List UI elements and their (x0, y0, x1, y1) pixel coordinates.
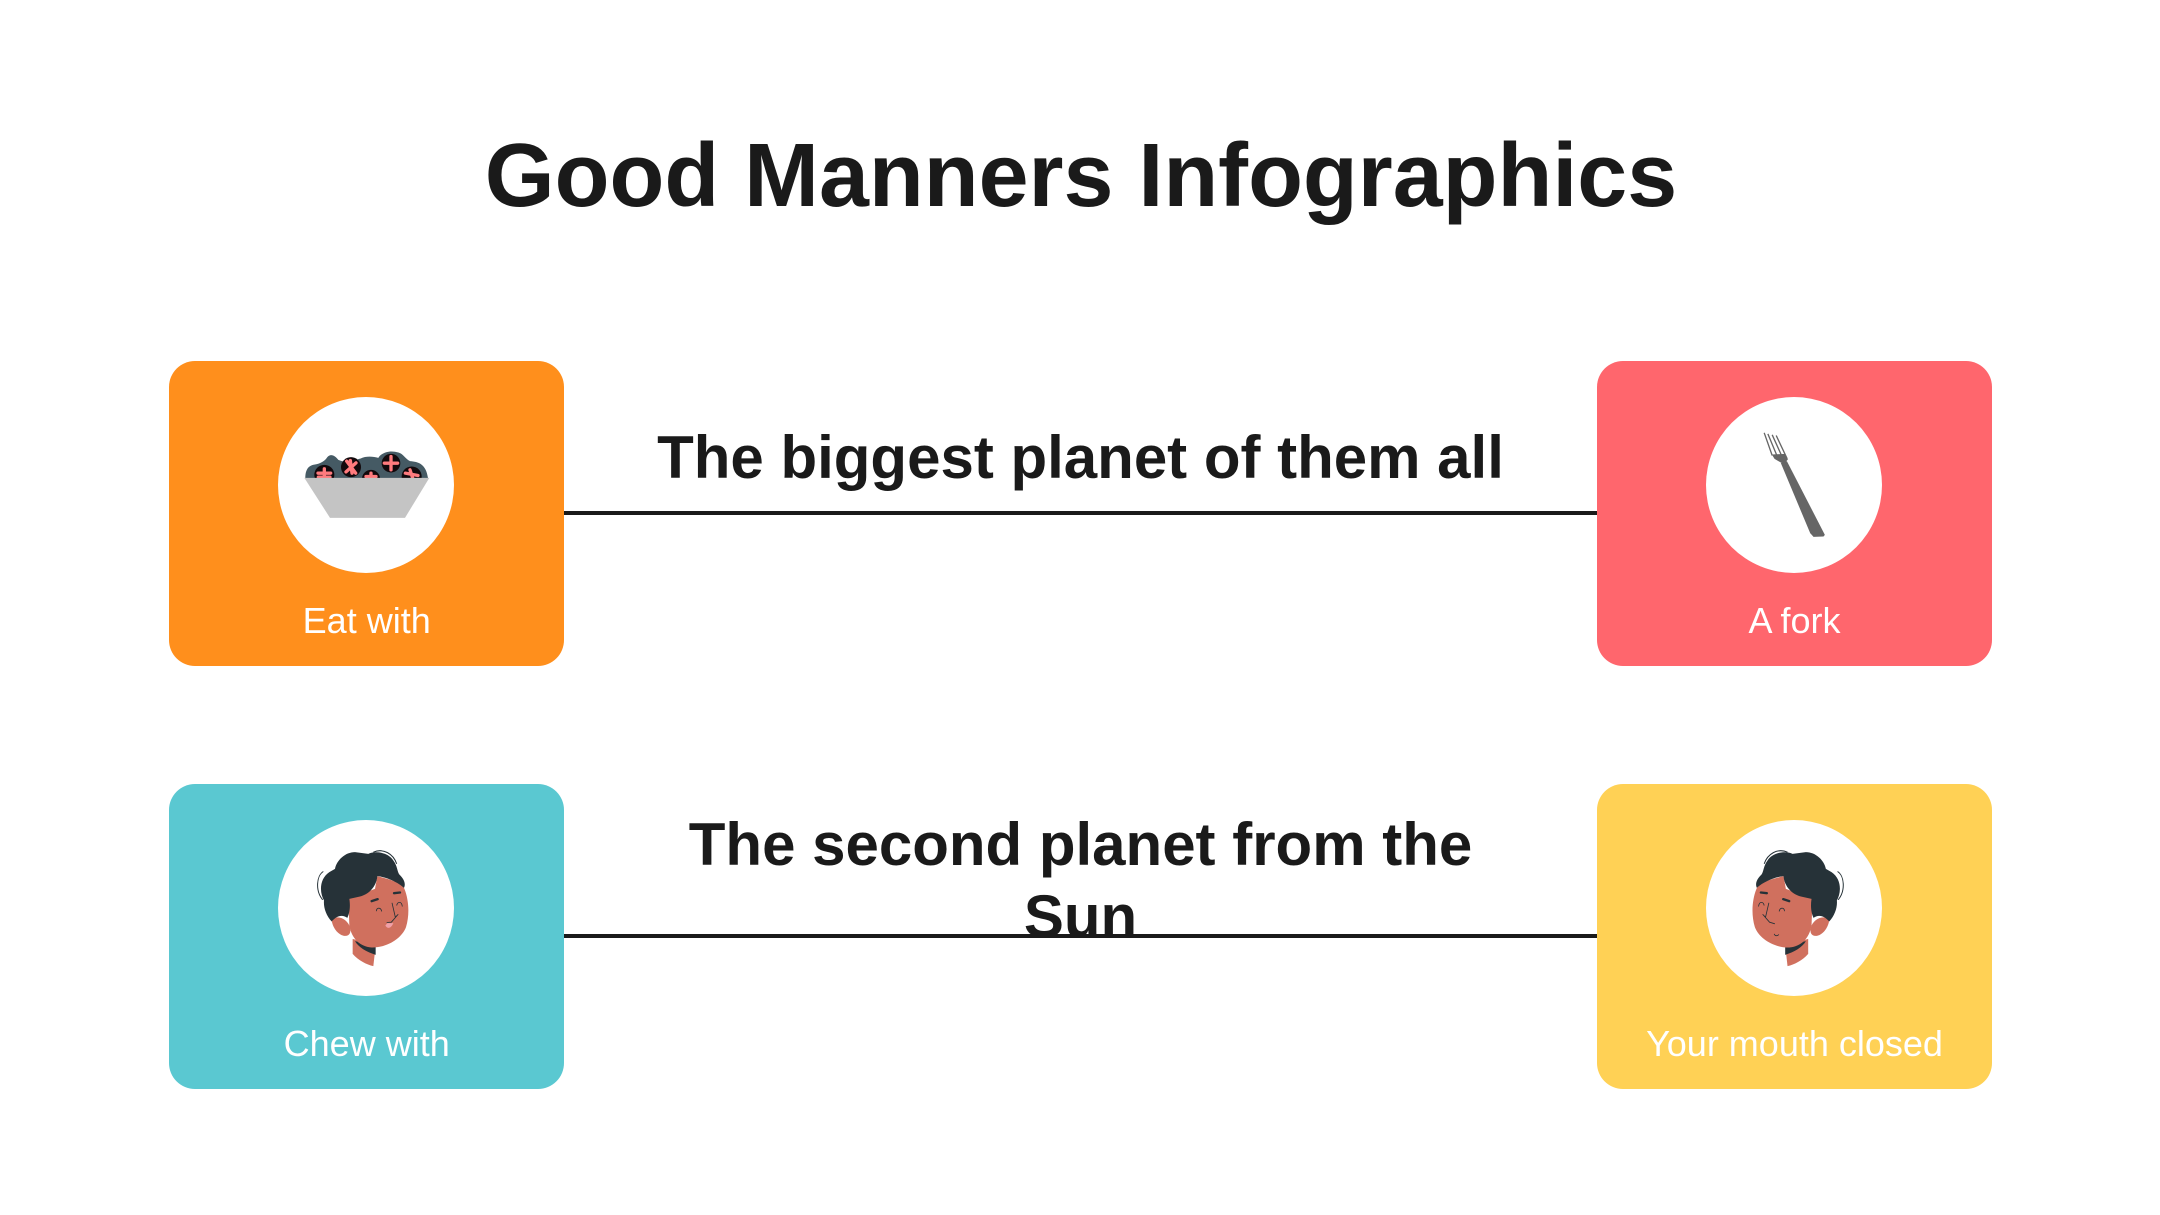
panel: eat with (169, 360, 564, 666)
hair (321, 852, 405, 921)
icon: face looking right (278, 820, 454, 996)
heading: first row description: The biggest planet of them all (657, 424, 1504, 491)
icon: salad bowl (278, 396, 454, 572)
face (1752, 876, 1812, 947)
ear (1810, 917, 1829, 935)
panel: your mouth closed (1597, 784, 1992, 1089)
panel: chew with (169, 784, 564, 1089)
icon: fork (1706, 396, 1882, 572)
ear (332, 917, 350, 935)
face (348, 876, 408, 947)
label: chew with: Chew with (284, 1022, 450, 1064)
label: a fork: A fork (1748, 600, 1841, 640)
heading: second row description: Sun (1024, 883, 1137, 950)
connector line: first row (564, 511, 1597, 515)
facial features (1761, 892, 1789, 901)
neck (1785, 938, 1808, 966)
label: eat with: Eat with (303, 600, 431, 640)
icon: face looking left (1706, 820, 1882, 996)
title: Good Manners Infographics (485, 126, 1677, 226)
hair strands (318, 850, 397, 899)
hair (1756, 852, 1840, 921)
panel: a fork (1597, 360, 1992, 666)
label: your mouth closed: Your mouth closed (1646, 1022, 1943, 1064)
hair strands (1764, 850, 1843, 899)
tongue (385, 923, 393, 927)
facial features (372, 892, 400, 901)
heading: second row description (689, 811, 1472, 950)
heading: second row description: The second planet from the (689, 811, 1472, 878)
connector line: second row (564, 934, 1597, 938)
neck (353, 938, 376, 966)
